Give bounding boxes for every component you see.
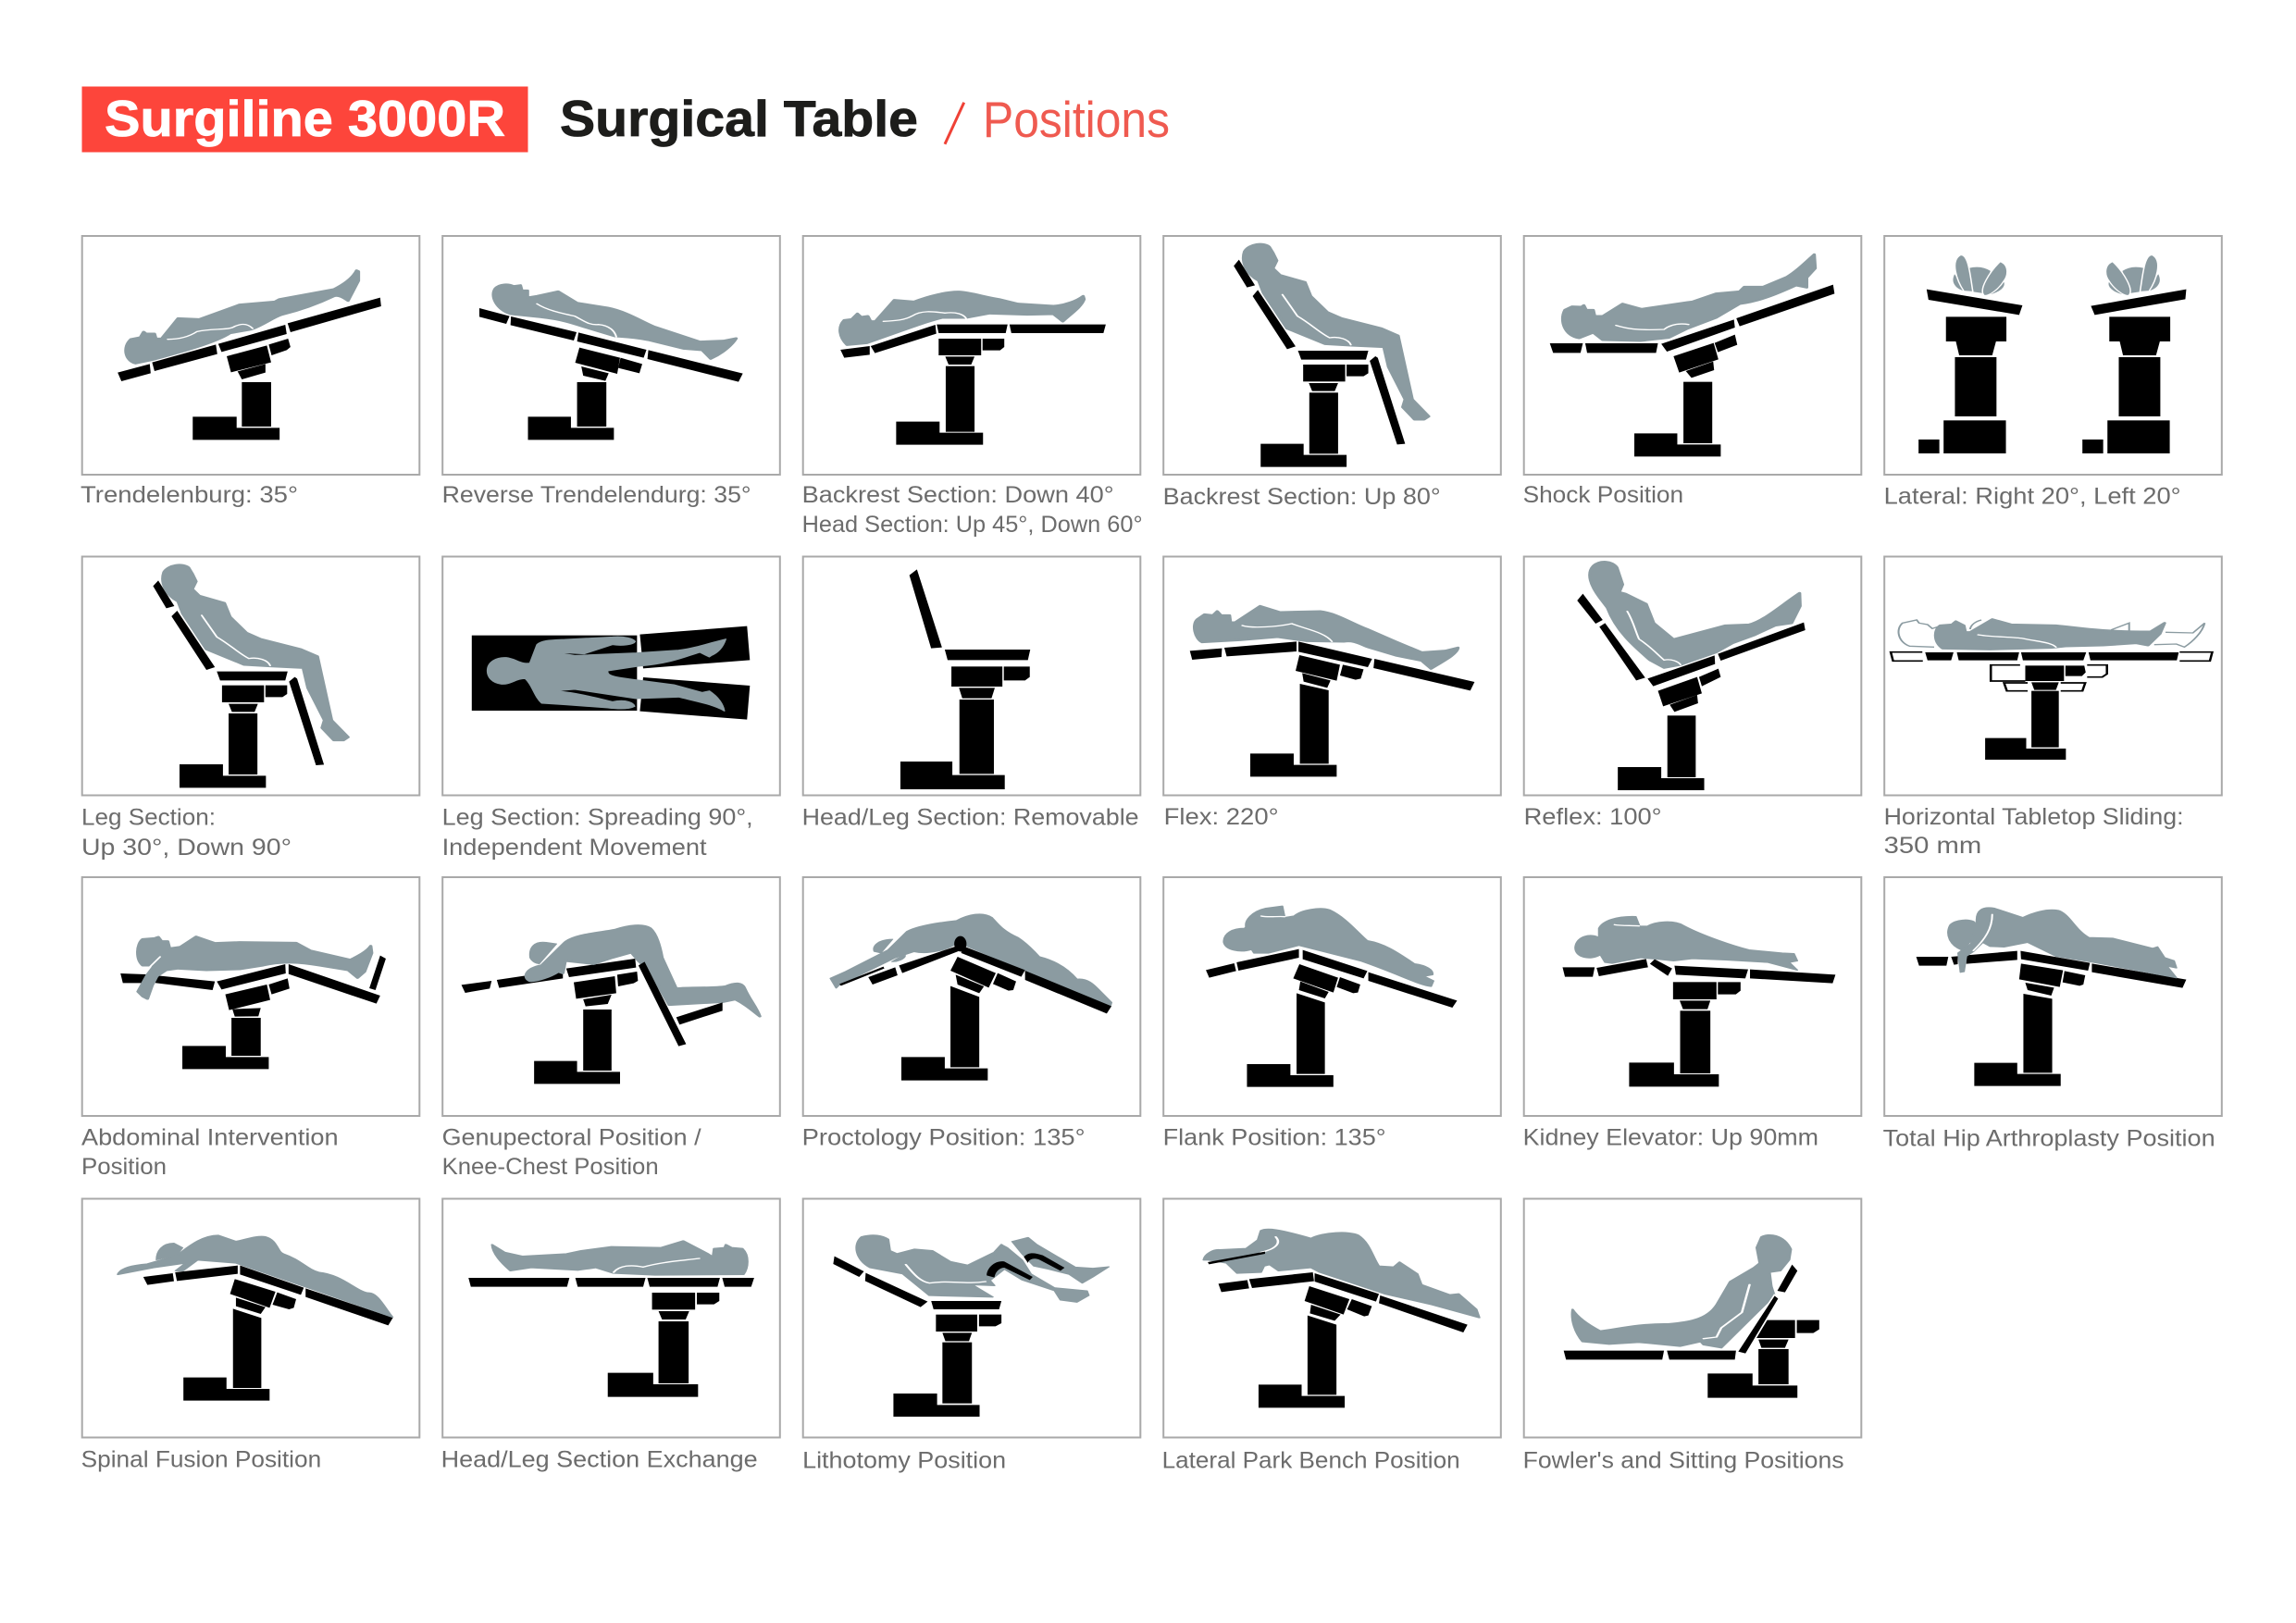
caption: Fowler's and Sitting Positions	[1523, 1448, 1844, 1474]
icon: table	[468, 1278, 754, 1397]
icon: patient with ghost outline	[1899, 619, 2204, 650]
caption: Up 30°, Down 90°	[81, 835, 292, 861]
icon: table	[1891, 652, 2213, 760]
caption: Trendelenburg: 35°	[81, 482, 298, 508]
icon: table	[1917, 951, 2186, 1086]
icon: table	[1564, 1320, 1819, 1398]
panel: Knee-chest	[442, 877, 780, 1180]
panel: Fowler's and sitting	[1523, 1199, 1861, 1474]
panel: Shock	[1523, 236, 1861, 508]
icon: patient	[138, 936, 372, 998]
panel: Lithotomy	[802, 1199, 1140, 1474]
icon: patient	[492, 1241, 748, 1275]
caption: Head/Leg Section: Removable	[802, 805, 1139, 831]
caption: Proctology Position: 135°	[802, 1125, 1086, 1151]
icon: table	[1577, 594, 1806, 790]
icon: table	[120, 956, 386, 1069]
icon: table top view	[472, 626, 750, 720]
panel: Total hip arthroplasty	[1883, 877, 2222, 1151]
caption: Flex: 220°	[1164, 804, 1279, 830]
caption: Position	[81, 1154, 167, 1180]
caption: Horizontal Tabletop Sliding:	[1884, 804, 2184, 830]
panel: Head/leg exchange	[441, 1199, 780, 1473]
icon: table	[1206, 949, 1457, 1087]
panel: Head/leg removable	[802, 557, 1140, 831]
caption: Genupectoral Position /	[442, 1125, 701, 1151]
caption	[1884, 804, 2184, 859]
icon: patient top view	[488, 637, 726, 711]
panel: Reflex	[1524, 557, 1861, 830]
panel: Abdominal intervention	[81, 877, 419, 1180]
caption: 350 mm	[1884, 833, 1981, 859]
panel: Backrest up	[1163, 236, 1501, 510]
caption: Reverse Trendelendurg: 35°	[442, 482, 751, 508]
icon: table	[1190, 641, 1474, 776]
caption	[802, 482, 1143, 538]
icon: patient	[526, 925, 760, 1016]
panel: Flank	[1163, 877, 1501, 1151]
icon: table tilted right	[1918, 290, 2022, 453]
panel: Kidney elevator	[1523, 877, 1861, 1151]
panel: Leg spreading	[442, 557, 780, 861]
icon: table	[1550, 285, 1834, 456]
icon: table	[143, 1266, 393, 1401]
caption: Lateral Park Bench Position	[1162, 1448, 1460, 1474]
caption: Reflex: 100°	[1524, 804, 1662, 830]
caption: Backrest Section: Up 80°	[1163, 484, 1441, 510]
icon: table	[479, 308, 743, 440]
icon: patient	[493, 285, 737, 359]
panel: Lateral	[1884, 236, 2222, 510]
panel: Horizontal sliding	[1884, 557, 2222, 859]
icon: table	[839, 936, 1111, 1081]
icon: patient	[163, 565, 348, 740]
icon: table	[462, 959, 638, 1084]
product name badge: Surgiline 3000R	[105, 90, 505, 147]
icon: patient	[1195, 606, 1458, 669]
caption	[442, 805, 753, 861]
icon: patient	[1223, 906, 1433, 986]
caption: Leg Section:	[81, 805, 216, 831]
caption: Head/Leg Section Exchange	[441, 1447, 758, 1473]
icon: patient	[1590, 562, 1800, 668]
icon: patient	[126, 270, 358, 364]
caption	[81, 805, 292, 861]
panel: Backrest down	[802, 236, 1143, 538]
caption: Flank Position: 135°	[1163, 1125, 1386, 1151]
caption: Leg Section: Spreading 90°,	[442, 805, 753, 831]
panel: Flex	[1163, 557, 1501, 830]
panel: Spinal fusion	[81, 1199, 419, 1473]
heading: positions: Positions	[983, 91, 1170, 148]
icon: patient	[1563, 254, 1815, 341]
icon: patient	[1204, 1229, 1479, 1318]
icon: patient	[1244, 244, 1429, 419]
heading: surgical table: Surgical Table	[560, 90, 918, 147]
panel: Proctology	[802, 877, 1140, 1151]
panel: Leg section	[81, 557, 419, 861]
icon: table	[1219, 1272, 1468, 1407]
title	[81, 87, 1170, 152]
caption	[442, 1125, 701, 1180]
caption: Shock Position	[1523, 482, 1683, 508]
icon: table	[833, 1257, 1001, 1417]
caption: Knee-Chest Position	[442, 1154, 659, 1180]
caption	[81, 1125, 339, 1180]
panel: Reverse Trendelenburg	[442, 236, 780, 508]
caption: Total Hip Arthroplasty Position	[1883, 1125, 2215, 1151]
caption: Head Section: Up 45°, Down 60°	[802, 512, 1143, 538]
icon: backrest	[1737, 1265, 1797, 1354]
icon: table	[153, 580, 324, 787]
icon: patient	[830, 914, 1111, 1007]
icon: patient	[840, 291, 1084, 345]
caption: Backrest Section: Down 40°	[802, 482, 1114, 508]
panel: Trendelenburg	[81, 236, 419, 508]
icon: patient	[1575, 917, 1797, 970]
icon: patient	[118, 1235, 392, 1317]
caption: Lateral: Right 20°, Left 20°	[1884, 484, 2181, 510]
icon: patient left	[2105, 255, 2161, 295]
caption: Lithotomy Position	[802, 1448, 1006, 1474]
caption: Independent Movement	[442, 835, 707, 861]
caption: Abdominal Intervention	[81, 1125, 339, 1151]
icon: leg section	[639, 961, 723, 1047]
icon: table	[840, 325, 1106, 445]
icon: table	[900, 569, 1030, 789]
panel: Lateral park bench	[1162, 1199, 1501, 1474]
caption: Spinal Fusion Position	[81, 1447, 321, 1473]
icon: table	[1234, 260, 1405, 467]
caption: Kidney Elevator: Up 90mm	[1523, 1125, 1818, 1151]
icon: table	[1562, 959, 1835, 1086]
icon: patient	[857, 1235, 1109, 1302]
icon: table	[118, 298, 381, 440]
icon: table tilted left	[2082, 290, 2186, 453]
icon: patient right	[1953, 255, 2007, 295]
icon: patient	[1948, 908, 2177, 978]
icon: patient	[1572, 1235, 1791, 1348]
